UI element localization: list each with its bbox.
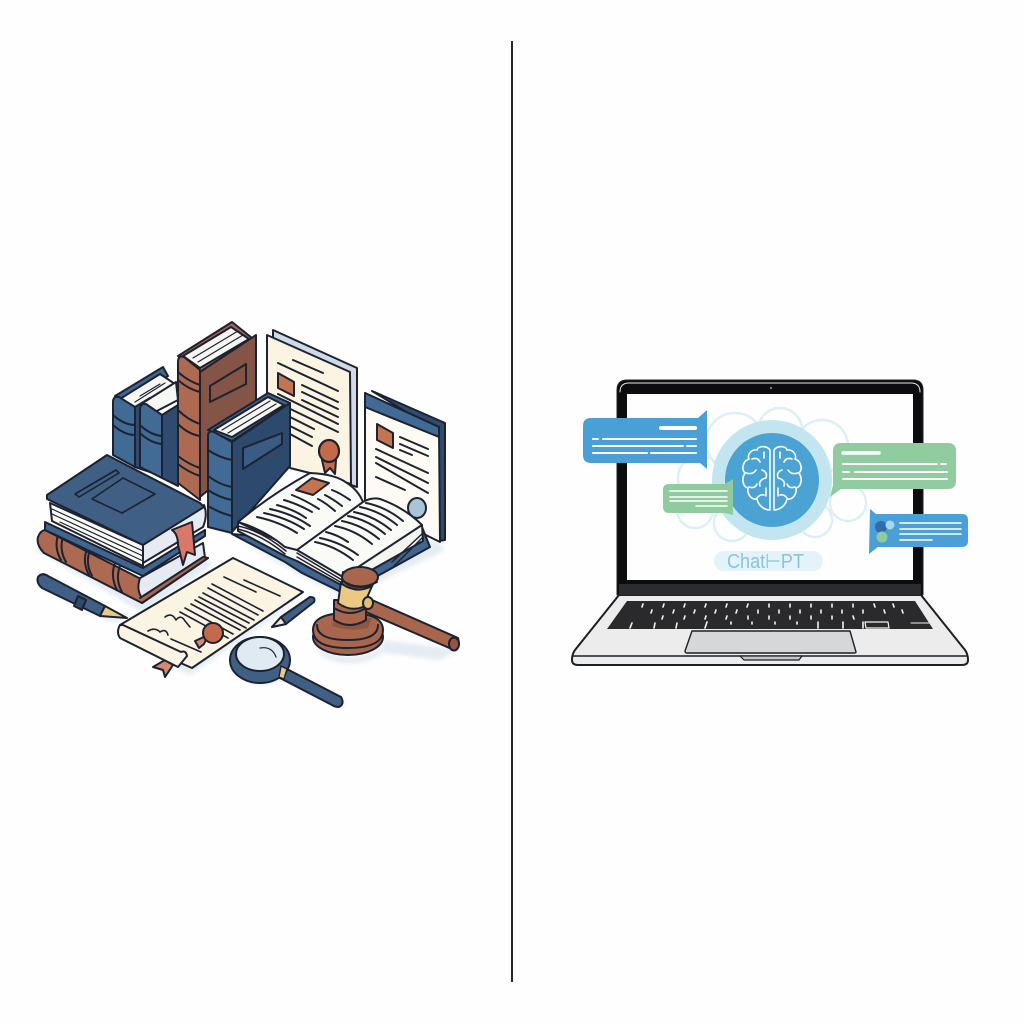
laptop lid (617, 380, 923, 595)
open book (232, 473, 430, 594)
gavel (313, 567, 459, 655)
ribbon bookmark (172, 522, 195, 565)
book: back blue second (140, 382, 178, 486)
chat bubble: blue top left (583, 410, 707, 469)
camera (770, 387, 772, 389)
ground shadows (36, 537, 458, 708)
book: front blue upright (208, 393, 290, 533)
front notch (740, 656, 802, 660)
book: tall brown (178, 322, 256, 500)
cloud outlines (677, 408, 866, 541)
scroll document (118, 558, 303, 677)
book: bottom brown flat (38, 530, 208, 603)
laptop base (572, 595, 968, 665)
book: back blue left (113, 367, 178, 472)
key gaps (630, 604, 903, 628)
keyboard (607, 601, 933, 629)
panel: law books and legal items (36, 322, 459, 708)
chat bubble: green small (663, 479, 733, 515)
chat bubble: blue lower right (869, 509, 968, 554)
chat bubble: green right (830, 443, 956, 497)
trackpad (685, 631, 856, 653)
book: top blue flat with pages (45, 455, 206, 576)
ribbon tail (153, 660, 173, 677)
document: back certificate (267, 330, 357, 487)
small pen (272, 597, 314, 627)
document: right with blue header (365, 391, 445, 542)
panel: laptop with ChatGPT (572, 380, 968, 665)
icon: brain (743, 447, 801, 510)
fountain pen (38, 574, 127, 618)
magnifying glass (230, 637, 343, 707)
center divider (511, 41, 513, 982)
screen (627, 394, 913, 580)
brain circle (712, 420, 832, 540)
label pill: Chat⊢PT (727, 551, 804, 573)
